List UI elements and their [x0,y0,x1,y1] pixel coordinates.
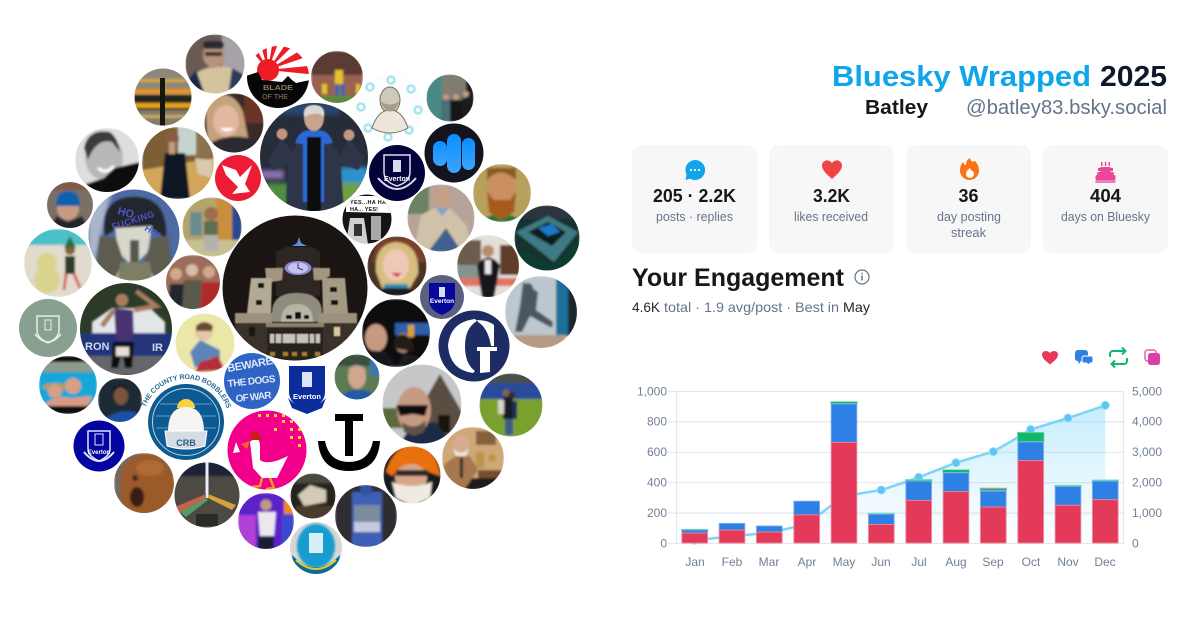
avatar: ironman finisher: IR [152,342,163,354]
avatar: man in blue jacket [260,103,368,212]
avatar: bobblehead in green [182,197,242,257]
avatar: blue bars logo [424,124,484,182]
icon: heart [822,160,842,179]
left axis labels: 1,000 [637,384,667,398]
avatar: stadium aerial [514,205,580,272]
stat card: days on Bluesky [1043,145,1168,253]
right axis labels: 0 [1132,536,1139,550]
chart: monthly engagement stacked bars with cumulative line [637,384,1162,569]
avatar: black and white portrait [75,128,140,195]
avatar: clock tower at night [222,215,368,363]
avatar: red sun banner [247,46,309,108]
avatar: black anchor T logo [318,414,380,471]
avatar: County Road Bobblers badge [141,374,231,460]
icon: legend quotes [1145,350,1160,365]
pink quote segment [980,487,1007,490]
avatar: group photo [426,74,474,122]
avatar: footballer in blue [98,378,142,424]
avatar: The Guardian G [438,310,510,382]
stat card: days on Bluesky: days on Bluesky [1061,209,1150,224]
month labels: Apr [798,555,816,569]
avatar: Everton crest small blue: Everton [88,450,111,456]
avatar: footballer mural [505,276,578,350]
avatar: group of three [165,255,221,311]
avatar: man in cap [185,34,246,96]
green repost segments [681,402,1119,530]
avatar: fighter pilot helmet: FUCKING [111,209,155,232]
avatar: bearded man [473,164,531,222]
stat card: day posting streak: day posting [937,209,1001,224]
avatar: ironman finisher [80,283,172,375]
user name: Batley [865,97,929,119]
right axis labels: 3,000 [1132,445,1162,459]
engagement summary line: total · 1.9 avg/post · Best in [664,299,839,315]
avatar: red sun banner: BLADE [263,85,293,92]
title: Bluesky Wrapped 2025: 2025 [1100,61,1167,93]
icon: legend reposts [1110,348,1127,368]
avatar: fighter pilot helmet [88,189,180,282]
avatar: man in suit [457,235,520,298]
avatar: fighter pilot helmet: HO [116,205,136,221]
avatar: red eagle logo [215,155,261,201]
avatar: meditating cartoon [356,74,424,142]
avatar: Everton crest sage [19,299,77,357]
avatar: Everton crest navy [369,145,425,201]
stat card: day posting streak: streak [951,225,986,240]
avatar: blonde woman [204,93,264,155]
title: Bluesky Wrapped 2025: Bluesky Wrapped [832,61,1091,93]
left axis labels: 400 [647,476,667,490]
month labels: May [833,555,855,569]
left axis labels: 200 [647,506,667,520]
stat card: likes received: likes received [794,209,868,224]
avatar: County Road Bobblers badge: THE COUNTY ROAD BOBBLERS [141,374,231,408]
engagement summary line: May [843,299,870,315]
month labels: Jul [911,555,927,569]
stat card: days on Bluesky: 404 [1090,186,1121,206]
avatar: cat [290,473,336,520]
month labels: Mar [759,555,779,569]
avatar: orange hat bearded man [383,445,441,506]
stat card: day posting streak [906,145,1031,253]
avatar: Everton crest grey-blue: Everton [430,298,454,305]
avatar: Beware the Dogs of War banner: THE DOGS [227,374,276,390]
month labels: Jan [685,555,705,569]
avatar: comic panel: HA... YES! [350,207,378,213]
avatar: Beware the Dogs of War banner: OF WAR [235,390,273,405]
avatar: fighter pilot helmet: HO! [143,223,162,240]
avatar: man in blue beanie [47,182,93,228]
avatar: snowman and elf [24,229,92,297]
stat card: posts and replies [632,145,757,253]
month labels: Dec [1094,555,1116,569]
avatar: man with sunglasses and pyramid [382,364,462,446]
avatar: woman in dress [142,127,214,199]
avatar: man in beige sweater [407,184,475,252]
engagement summary line: 4.6K [632,299,661,315]
month labels: Oct [1022,555,1041,569]
avatar: brown mastiff [114,453,176,515]
avatar: Everton crest small blue [74,420,124,472]
stat card: posts and replies: 205 · 2.2K [653,186,736,206]
avatar: rainbow prism concert [174,462,240,528]
stat card: likes received: 3.2K [813,186,850,206]
right axis labels: 2,000 [1132,476,1162,490]
user handle: @batley83.bsky.social [966,97,1167,119]
avatar: ironman finisher: RON [85,341,110,353]
avatar: red sun banner: OF THE [262,94,288,101]
right axis labels: 5,000 [1132,384,1162,398]
avatar: Everton crest cyan [290,522,342,576]
avatar: Everton crest navy: Everton [384,176,410,183]
avatar: footballer kit photo [311,51,363,104]
icon: legend replies [1075,350,1093,365]
avatar: couple in pool [39,356,97,414]
avatar: stained glass panel [335,484,397,547]
avatar: man with clocks [442,427,504,490]
avatar: man at Eurovision [238,493,294,550]
stat card: posts and replies: posts · replies [656,209,733,224]
left axis labels: 800 [647,414,667,428]
right axis labels [1132,384,1162,550]
icon: legend heart [1042,351,1058,364]
stat card: likes received [769,145,894,253]
month labels: Feb [722,555,743,569]
avatar: Everton crest royal [282,364,332,414]
icon: info [855,270,869,284]
avatar: Everton crest grey-blue [420,275,464,319]
blue reply segments [682,404,1118,533]
avatar: blonde woman smiling [367,236,427,296]
month labels: Nov [1057,555,1079,569]
month labels: Jun [871,555,891,569]
avatar: pink goose [227,410,307,490]
heading: Your Engagement: Your Engagement [632,264,845,292]
avatar: couple on pitch [479,373,543,437]
icon: chat bubble [685,160,705,180]
chart legend icons [1042,348,1160,368]
right axis labels: 4,000 [1132,414,1162,428]
avatar: caricature on yellow [175,313,235,373]
red like segments [682,442,1118,543]
avatar: sunset tower [134,68,192,126]
icon: flame [960,158,979,180]
panel: avatar bubble cluster [19,34,580,574]
avatar: County Road Bobblers badge: CRB [176,438,196,448]
cumulative line with points [691,401,1109,544]
icon: cake [1096,162,1116,183]
month labels: Aug [945,555,967,569]
avatar: Beware the Dogs of War banner: BEWARE [226,355,274,375]
avatar: man with hills [334,354,380,402]
left axis labels: 600 [647,445,667,459]
right axis labels: 1,000 [1132,506,1162,520]
left axis labels: 0 [660,536,667,550]
avatar: Beware the Dogs of War banner [224,353,280,409]
avatar: couple at night [362,299,431,367]
left axis labels [637,384,667,550]
avatar: comic panel [342,194,392,244]
avatar: Everton crest royal: Everton [293,392,321,401]
cumulative area [695,405,1105,543]
stat card: day posting streak: 36 [958,186,978,206]
month labels [685,555,1116,569]
avatar: comic panel: YES...HA HA [350,200,386,206]
month labels: Sep [982,555,1004,569]
